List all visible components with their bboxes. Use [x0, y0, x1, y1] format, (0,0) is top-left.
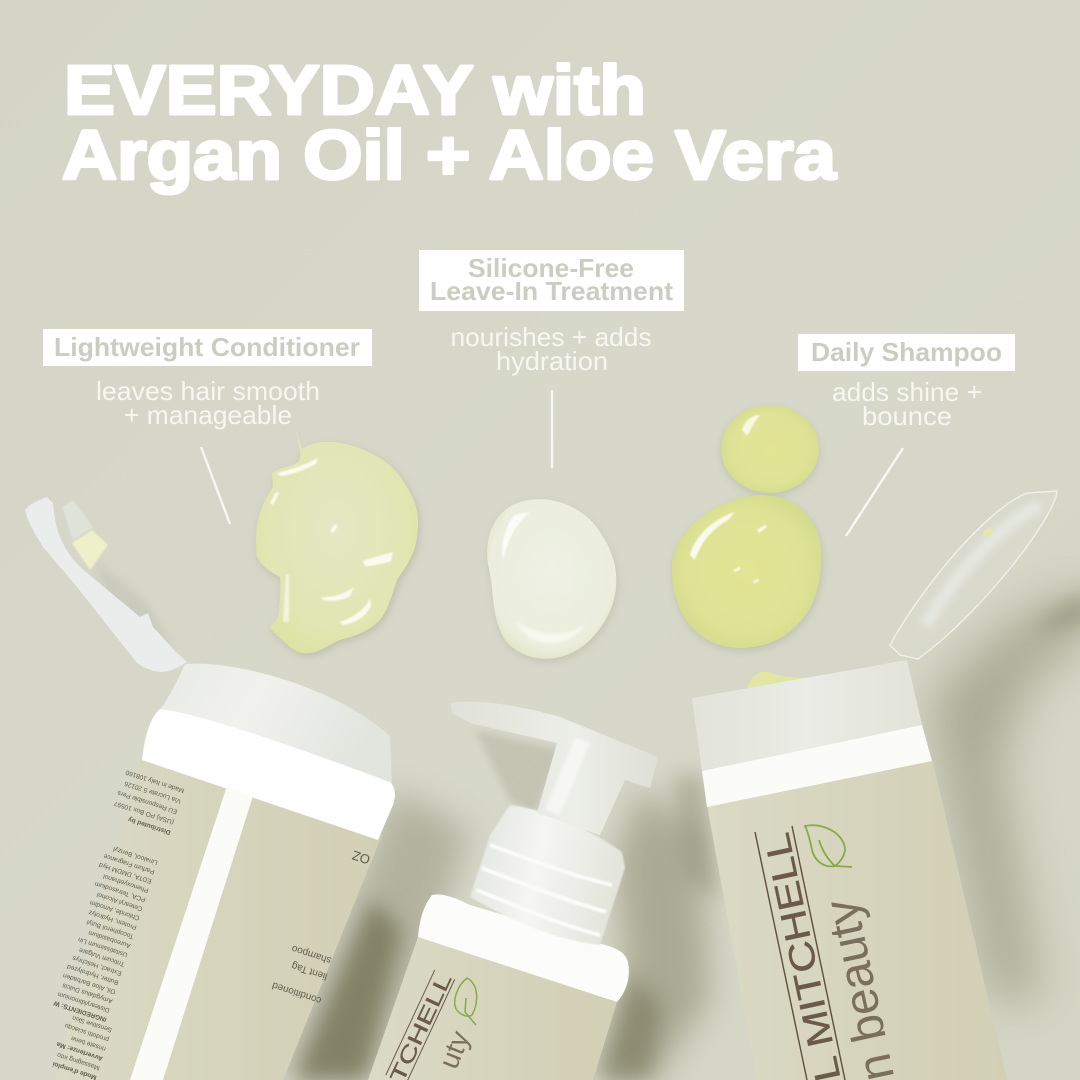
- capacity and directions text: [271, 848, 372, 1006]
- shampoo bottle: [692, 491, 1057, 1080]
- label: leave-in treatment: Leave-In Treatment: [430, 276, 673, 306]
- threaded neck: [470, 805, 625, 945]
- label body: [55, 755, 382, 1080]
- capacity and directions text: lient Tag: [290, 960, 329, 982]
- capacity and directions text: conditioned: [271, 979, 323, 1006]
- pump highlight: [545, 738, 590, 815]
- ingredients text: Triticum Vulgare: [78, 946, 126, 967]
- ingredients text: Tocopherol Butyl: [86, 918, 135, 940]
- label: daily shampoo: Daily Shampoo: [811, 337, 1002, 367]
- cap: [692, 660, 922, 771]
- ingredients text: Linalool, Benzyl: [112, 845, 159, 866]
- shampoo swatch small drop: [721, 405, 819, 496]
- ingredients text: Massaging into: [56, 1051, 101, 1071]
- product name: uty: [433, 1027, 476, 1073]
- conditioner bottle: [25, 497, 395, 1080]
- flip cap lid: [25, 497, 187, 672]
- ingredients text: Protein, Hydrolyz: [88, 908, 138, 931]
- flip cap lid: [890, 491, 1057, 659]
- text: leave-in benefit: nourishes + adds: [450, 322, 652, 352]
- text: shampoo benefit: [832, 377, 982, 431]
- ingredients text: Sensitive Skin: [71, 1014, 113, 1033]
- ingredients text: prodotti sciacqu: [64, 1022, 110, 1043]
- ingredients text: Parfum Fragrance: [103, 852, 156, 875]
- ingredients text: EU Responsible Pers: [116, 789, 178, 815]
- label: leave-in treatment: [419, 250, 684, 311]
- label: lightweight conditioner: Lightweight Conditioner: [54, 332, 360, 362]
- conditioner swatch: [256, 427, 420, 656]
- text: conditioner benefit: + manageable: [124, 400, 292, 430]
- brand wordmark: L MITCHELL: [756, 829, 848, 1080]
- collar: [418, 894, 629, 1002]
- ingredients text: Distributed by: [127, 815, 172, 836]
- collar: [142, 709, 395, 840]
- capacity and directions text: shampoo: [290, 942, 333, 966]
- title: [62, 51, 837, 194]
- ingredients text: Aureobasidium: [87, 929, 132, 949]
- ingredients text: Distearyldimonium: [56, 990, 111, 1014]
- text: leave-in benefit: [450, 322, 652, 376]
- ingredients text: PCA, Tetrasodium: [94, 880, 147, 903]
- label body: [707, 758, 1007, 1080]
- ingredients text: INGREDIENTS: W: [52, 999, 108, 1023]
- title: Argan Oil + Aloe Vera: [62, 116, 837, 194]
- ingredients text: Cetearyl Alcohol: [96, 891, 144, 912]
- ingredients text: [49, 768, 185, 1080]
- ingredients text: Usitatissimum Lin: [77, 935, 129, 958]
- text: conditioner benefit: leaves hair smooth: [96, 376, 320, 406]
- pump head: [450, 702, 658, 835]
- shampoo swatch large drop: [672, 495, 822, 651]
- text: shampoo benefit: bounce: [862, 401, 952, 431]
- text: shampoo benefit: adds shine +: [832, 377, 982, 407]
- icon: leaf: [805, 825, 852, 867]
- capacity and directions text: OZ: [350, 848, 372, 867]
- shadows cast by the bottles: [280, 585, 1080, 1080]
- ingredients text: Avvertenze: Ma: [56, 1040, 104, 1062]
- ingredients text: Extract, Helichrys: [71, 954, 123, 977]
- label body: [368, 937, 617, 1080]
- ingredients text: Amygdalus Dulcis: [61, 981, 114, 1004]
- ingredients text: Chloride, Amodim: [88, 898, 141, 921]
- ingredients text: rinsate bene: [70, 1034, 107, 1052]
- pointer lines: [201, 390, 903, 536]
- ingredients text: EDTA, DMDM Hyd: [98, 861, 153, 884]
- collar: [702, 725, 932, 807]
- title: EVERYDAY with: [64, 51, 646, 129]
- ingredients text: (USA) PO Box 10597: [113, 799, 175, 825]
- brand wordmark: [385, 970, 457, 1080]
- text: conditioner benefit: [96, 376, 320, 430]
- label: leave-in treatment: Silicone-Free: [468, 253, 634, 283]
- cap: [160, 664, 392, 785]
- text: leave-in benefit: hydration: [496, 346, 608, 376]
- ingredients text: Via Lucrate 5 20126: [123, 779, 182, 804]
- ingredients text: Oil, Aloe Barbaden: [62, 971, 117, 995]
- icon: leaf: [455, 978, 477, 1025]
- leave-in treatment swatch: [487, 499, 617, 662]
- product residue: [745, 672, 825, 697]
- white label stripe: [130, 786, 253, 1080]
- ingredients text: Butter, Hydrolyzed: [66, 962, 120, 986]
- ingredients text: Made in Italy 108160: [125, 768, 185, 794]
- ingredients text: Phenoxyethanol: [102, 872, 150, 894]
- leave-in pump bottle: [368, 702, 658, 1080]
